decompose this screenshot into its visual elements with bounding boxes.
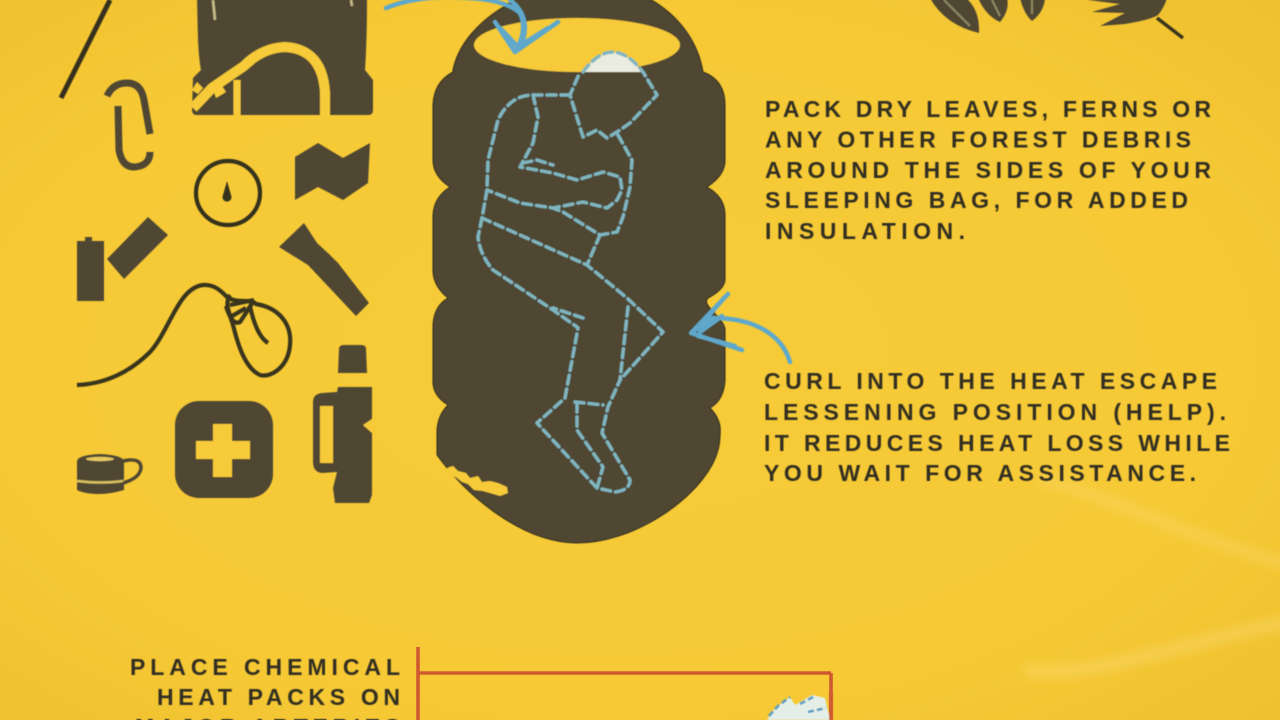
text: insulation tip: ANY OTHER FOREST DEBRIS (765, 126, 1191, 152)
icon: folded map (295, 143, 370, 200)
icon: backpack (192, 0, 373, 116)
body diagram red frame (418, 647, 831, 720)
icon: hand with heat pack (767, 692, 831, 720)
bag opening (474, 18, 680, 72)
text: HELP position tip (764, 368, 1230, 486)
icon: compass (196, 161, 260, 225)
icon: battery (77, 237, 104, 301)
text: HELP position tip: LESSENING POSITION (HELP). (764, 399, 1226, 425)
text: HELP position tip: YOU WAIT FOR ASSISTANCE. (764, 460, 1196, 486)
head dome (583, 52, 642, 72)
sleeping bag (433, 0, 725, 543)
icon: thermos (313, 345, 372, 503)
icon: first aid kit (175, 401, 273, 498)
text: insulation tip: PACK DRY LEAVES, FERNS OR (765, 96, 1211, 122)
icon: camp mug (77, 454, 141, 494)
icon: carabiner (107, 83, 150, 167)
text: insulation tip: SLEEPING BAG, FOR ADDED (765, 187, 1188, 213)
text: chemical heat packs tip: PLACE CHEMICAL (130, 654, 400, 680)
gear icons column (61, 0, 373, 503)
text: HELP position tip: CURL INTO THE HEAT ESCAPE (764, 368, 1217, 394)
text: HELP position tip: IT REDUCES HEAT LOSS WHILE (764, 430, 1230, 456)
icon: trekking pole (61, 0, 110, 98)
icon: pocket knife (107, 217, 168, 279)
frayed print wear (447, 466, 508, 496)
arrow: to opening (386, 0, 558, 52)
text: chemical heat packs tip (130, 654, 400, 720)
icon: fern frond (1087, 0, 1183, 38)
icon: leaves (930, 0, 1045, 33)
icon: flashlight (279, 223, 369, 316)
bag body (433, 0, 725, 543)
dashed figure in HELP position (478, 52, 663, 492)
text: insulation tip (765, 96, 1211, 244)
arrow: to sleeping position (691, 294, 790, 362)
text: insulation tip: INSULATION. (765, 218, 965, 244)
icon: rope with knot (77, 285, 290, 385)
text: chemical heat packs tip: HEAT PACKS ON (157, 684, 400, 710)
text: insulation tip: AROUND THE SIDES OF YOUR (765, 157, 1211, 183)
